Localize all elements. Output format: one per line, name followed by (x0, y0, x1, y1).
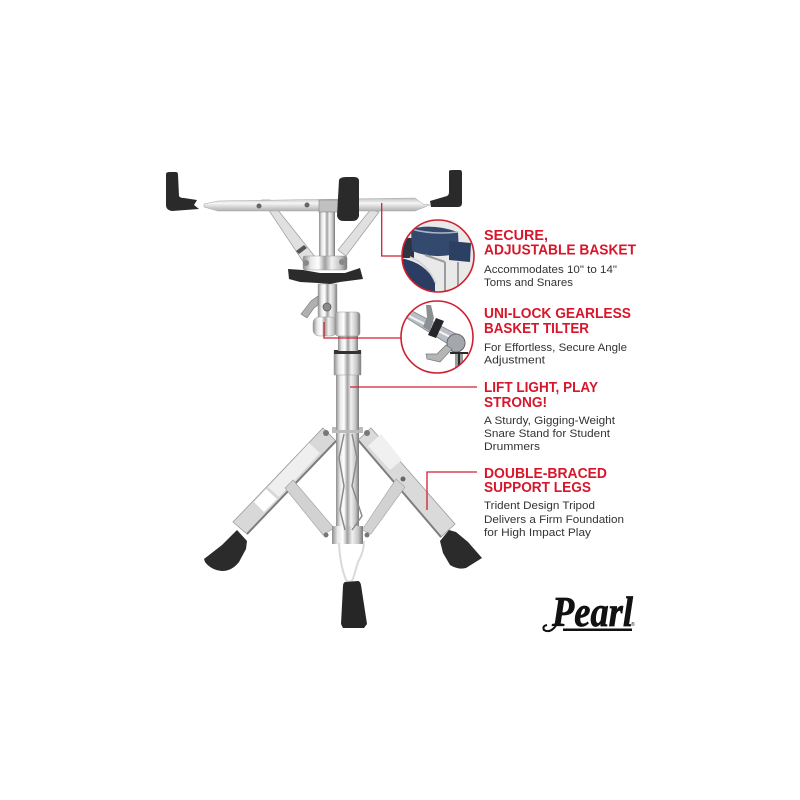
black basket wing (288, 268, 363, 284)
left cradle (166, 172, 199, 211)
callout text: tilter (484, 306, 631, 366)
heading: SECURE, (484, 228, 548, 244)
right foot (440, 530, 482, 569)
lower lever (426, 345, 452, 362)
Pearl logo: Pearl (551, 590, 633, 636)
heading (484, 228, 636, 258)
left foot (204, 530, 247, 571)
callout line: basket (382, 203, 403, 256)
heading (484, 306, 631, 337)
black clip (428, 318, 444, 338)
description (484, 342, 627, 366)
callout line: lift (350, 386, 477, 388)
latch (423, 305, 434, 331)
description (484, 500, 624, 539)
description (484, 264, 617, 289)
description: Drummers (484, 441, 541, 453)
left upper leg (233, 428, 336, 534)
leg bolts (323, 430, 329, 436)
basket center clamp (319, 200, 338, 212)
description: A Sturdy, Gigging-Weight (484, 415, 615, 427)
arm bolts (256, 202, 310, 208)
main tube (336, 372, 359, 430)
basket struts (262, 200, 379, 270)
chrome arm (407, 311, 456, 344)
heading: STRONG! (484, 395, 547, 411)
callout text: lift (484, 380, 615, 453)
center tubes (332, 335, 363, 544)
upper tube (338, 335, 358, 351)
spider hub (336, 428, 359, 543)
description: for High Impact Play (484, 527, 592, 539)
heading: LIFT LIGHT, PLAY (484, 380, 598, 396)
inset: tilter closeup (400, 300, 474, 374)
snare stand (166, 170, 482, 628)
dark backdrop (402, 238, 414, 258)
blue tom drum (411, 227, 459, 256)
joint (447, 334, 465, 352)
pedal linkage (339, 541, 364, 582)
heading: ADJUSTABLE BASKET (484, 242, 636, 258)
callout text: legs (484, 466, 624, 539)
tilter assembly (301, 284, 360, 336)
floor tom drum (402, 258, 435, 292)
description: For Effortless, Secure Angle (484, 342, 627, 354)
tilter knob (323, 303, 331, 311)
description: Toms and Snares (484, 277, 574, 289)
stand legs (233, 428, 455, 538)
basket arm (204, 198, 430, 211)
pedal (341, 581, 367, 628)
basket upper column (319, 202, 335, 268)
logo underline (563, 628, 632, 631)
tilter handle (301, 296, 318, 318)
hardware (425, 255, 458, 292)
heading: BASKET TILTER (484, 321, 589, 337)
description (484, 415, 615, 453)
right cradle (430, 170, 462, 207)
heading (484, 380, 598, 411)
callout text: basket (484, 228, 636, 289)
logo swash (543, 612, 560, 631)
description: Delivers a Firm Foundation (484, 514, 624, 526)
callout line: tilter (324, 322, 401, 338)
inset: drum kit (400, 220, 474, 296)
description: Accommodates 10" to 14" (484, 264, 617, 276)
description: Snare Stand for Student (484, 428, 610, 440)
callout line: legs (427, 472, 477, 510)
height collar (334, 351, 361, 375)
center cradle (337, 177, 359, 221)
small tom drum (449, 241, 471, 262)
heading (484, 466, 607, 496)
heading: UNI-LOCK GEARLESS (484, 306, 631, 322)
heading: DOUBLE-BRACED (484, 466, 607, 482)
description: Trident Design Tripod (484, 500, 595, 512)
inner leg braces (285, 480, 334, 535)
description: Adjustment (484, 354, 545, 366)
heading: SUPPORT LEGS (484, 480, 591, 496)
right upper leg (358, 428, 455, 537)
registered mark: ® (631, 621, 635, 628)
